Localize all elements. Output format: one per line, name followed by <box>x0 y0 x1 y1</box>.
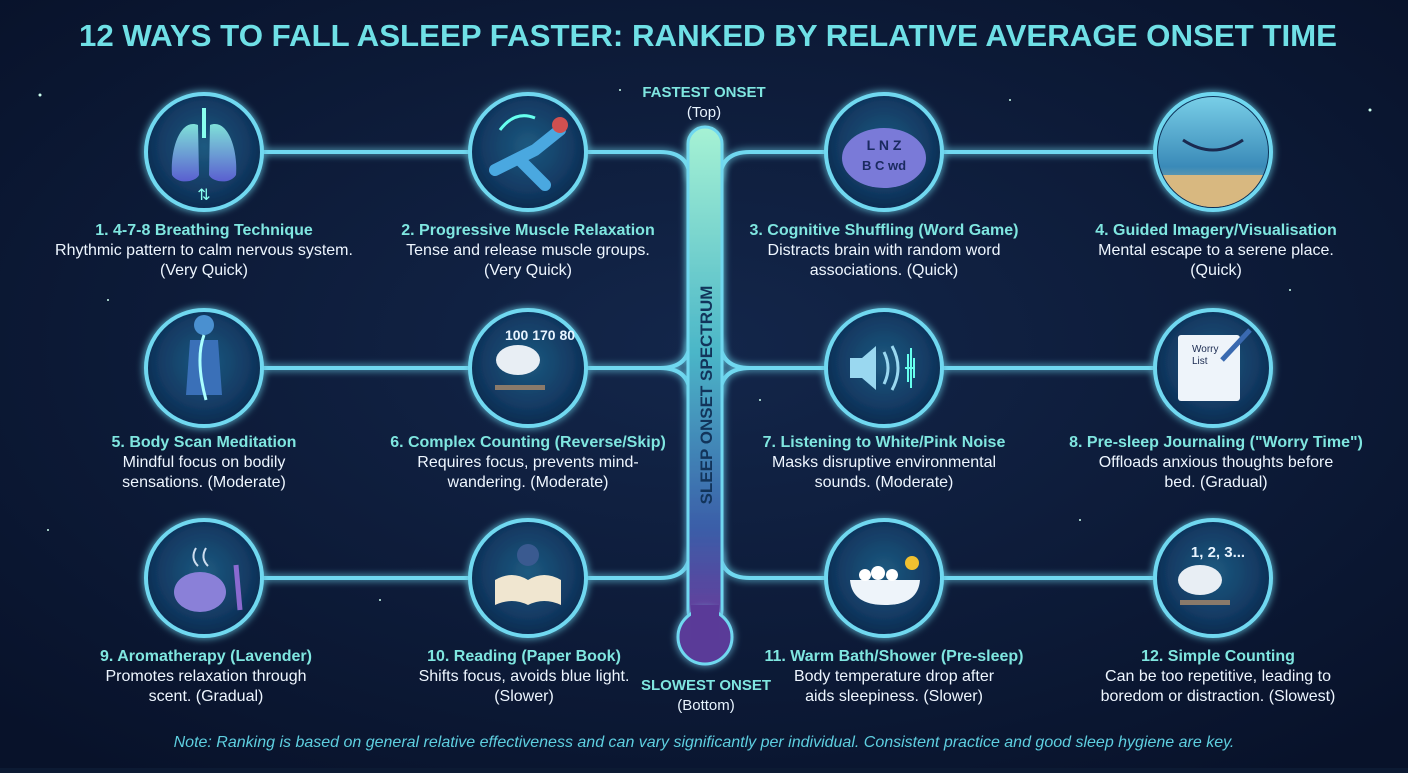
item 5 <box>112 434 296 491</box>
item 12 <box>1101 648 1335 705</box>
label: slowest onset: SLOWEST ONSET <box>641 677 771 694</box>
item 10: Shifts focus, avoids blue light. <box>419 668 629 685</box>
item 11 <box>764 648 1024 705</box>
icon: journal: Worry <box>1192 344 1218 355</box>
item 1: 1. 4-7-8 Breathing Technique <box>95 222 313 239</box>
item 3: Distracts brain with random word <box>768 242 1000 259</box>
item 12: Can be too repetitive, leading to <box>1105 668 1331 685</box>
icon: lungs: ⇅ <box>197 187 211 204</box>
item 10 <box>419 648 629 705</box>
icon: bath <box>850 556 920 605</box>
item 6: wandering. (Moderate) <box>447 474 608 491</box>
item 3 <box>749 222 1019 279</box>
icon: muscle relaxation <box>495 116 568 185</box>
icon: simple counting sheep <box>1178 544 1245 605</box>
item 6 <box>390 434 666 491</box>
item 7: 7. Listening to White/Pink Noise <box>763 434 1005 451</box>
item 4: (Quick) <box>1190 262 1242 279</box>
label: slowest onset <box>641 677 771 714</box>
text blocks <box>55 222 1363 705</box>
item 12: boredom or distraction. (Slowest) <box>1101 688 1335 705</box>
item 4: Mental escape to a serene place. <box>1098 242 1334 259</box>
icon: brain words: B C wd <box>862 158 906 173</box>
item 8: Offloads anxious thoughts before <box>1099 454 1333 471</box>
icon: white noise speaker <box>850 346 914 390</box>
item 8: bed. (Gradual) <box>1164 474 1268 491</box>
item 9 <box>100 648 312 705</box>
item 12: 12. Simple Counting <box>1141 648 1295 665</box>
item 7 <box>763 434 1005 491</box>
icon: brain words: L N Z <box>867 137 902 153</box>
item 9: scent. (Gradual) <box>149 688 263 705</box>
icon: sheep counting: 100 170 80 <box>505 327 575 343</box>
item 9: Promotes relaxation through <box>106 668 306 685</box>
item 8: 8. Pre-sleep Journaling ("Worry Time") <box>1069 434 1363 451</box>
item 3: associations. (Quick) <box>810 262 958 279</box>
item 1: Rhythmic pattern to calm nervous system. <box>55 242 353 259</box>
item 9: 9. Aromatherapy (Lavender) <box>100 648 312 665</box>
item 11: Body temperature drop after <box>794 668 995 685</box>
item 2: (Very Quick) <box>484 262 572 279</box>
item 1 <box>55 222 353 279</box>
footnote: Note: Ranking is based on general relative effectiveness and can vary significantly per individual. Consistent practice and good sleep hygiene are key. <box>174 734 1234 751</box>
label: fastest onset: FASTEST ONSET <box>642 84 766 101</box>
icon: lungs <box>172 108 236 204</box>
title: 12 WAYS TO FALL ASLEEP FASTER: RANKED BY RELATIVE AVERAGE ONSET TIME <box>79 18 1337 53</box>
item 2: 2. Progressive Muscle Relaxation <box>401 222 655 239</box>
item 1: (Very Quick) <box>160 262 248 279</box>
icon circles <box>146 94 1271 636</box>
icon: journal <box>1178 330 1250 401</box>
icon: diffuser <box>174 548 240 612</box>
connector lines <box>262 152 1155 578</box>
item 4 <box>1095 222 1337 279</box>
icon: simple counting sheep: 1, 2, 3... <box>1191 544 1245 561</box>
item 6: Requires focus, prevents mind- <box>417 454 639 471</box>
item 5: sensations. (Moderate) <box>122 474 286 491</box>
item 4: 4. Guided Imagery/Visualisation <box>1095 222 1337 239</box>
thermometer: sleep onset spectrum: SLEEP ONSET SPECTRUM <box>697 286 716 504</box>
item 8 <box>1069 434 1363 491</box>
label: fastest onset <box>642 84 766 121</box>
icon: reading <box>495 544 561 605</box>
icon: body scan <box>186 315 222 400</box>
icon: sheep counting <box>495 327 575 390</box>
label: slowest onset: (Bottom) <box>677 697 735 714</box>
item 5: Mindful focus on bodily <box>123 454 285 471</box>
item 10: 10. Reading (Paper Book) <box>427 648 621 665</box>
icon: brain words <box>842 128 926 188</box>
item 3: 3. Cognitive Shuffling (Word Game) <box>749 222 1019 239</box>
item 11: aids sleepiness. (Slower) <box>805 688 983 705</box>
item 7: sounds. (Moderate) <box>815 474 953 491</box>
item 11: 11. Warm Bath/Shower (Pre-sleep) <box>764 648 1024 665</box>
item 7: Masks disruptive environmental <box>772 454 996 471</box>
thermometer: sleep onset spectrum <box>678 127 732 664</box>
item 6: 6. Complex Counting (Reverse/Skip) <box>390 434 666 451</box>
icon: journal: List <box>1192 356 1208 367</box>
item 10: (Slower) <box>494 688 554 705</box>
item 2: Tense and release muscle groups. <box>406 242 650 259</box>
item 5: 5. Body Scan Meditation <box>112 434 296 451</box>
label: fastest onset: (Top) <box>687 104 721 121</box>
icon: guided imagery <box>1158 97 1268 207</box>
item 2 <box>401 222 655 279</box>
